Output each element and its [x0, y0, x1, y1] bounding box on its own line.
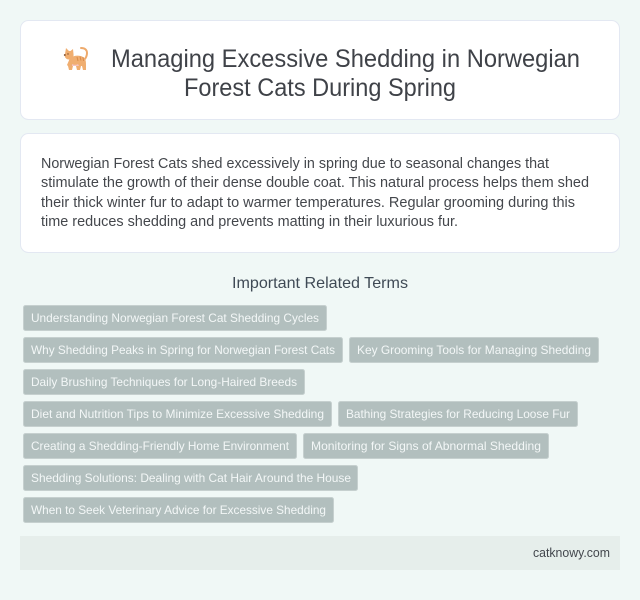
title: Forest Cats During Spring: [184, 74, 456, 102]
tag: shedding cycles: Understanding Norwegian Forest Cat Shedding Cycles: [31, 311, 319, 325]
tag: spring peak: Why Shedding Peaks in Spring for Norwegian Forest Cats: [31, 343, 335, 357]
tag: grooming tools: Key Grooming Tools for Managing Shedding: [357, 343, 591, 357]
text block: description: Norwegian Forest Cats shed excessively in spring due to seasonal changes that: [41, 156, 549, 172]
panel: description card: [20, 134, 620, 252]
tag: spring peak: [24, 338, 342, 362]
tag: abnormal shedding: Monitoring for Signs of Abnormal Shedding: [311, 439, 541, 453]
tag: daily brushing: [24, 370, 304, 394]
tag: home environment: [24, 434, 296, 458]
title: [111, 45, 580, 102]
tag: bathing strategies: Bathing Strategies for Reducing Loose Fur: [346, 407, 570, 421]
tag: grooming tools: [350, 338, 598, 362]
panel: title card: [20, 20, 620, 120]
footer bar: [20, 536, 620, 570]
tag list: [24, 306, 598, 522]
text block: description: time reduces shedding and prevents matting in their luxurious fur.: [41, 214, 458, 230]
tag: shedding cycles: [24, 306, 326, 330]
tag: veterinary advice: When to Seek Veterinary Advice for Excessive Shedding: [31, 503, 326, 517]
tag: bathing strategies: [338, 402, 578, 426]
text block: description: [41, 156, 589, 230]
tag: diet and nutrition: Diet and Nutrition Tips to Minimize Excessive Shedding: [31, 407, 324, 421]
tag: veterinary advice: [24, 498, 334, 522]
footer source text: catknowy.com: [533, 545, 610, 560]
tag: home environment: Creating a Shedding-Friendly Home Environment: [31, 439, 290, 453]
tag: shedding solutions: [24, 466, 358, 490]
text block: description: stimulate the growth of their dense double coat. This natural process helps them shed: [41, 175, 589, 191]
tag: abnormal shedding: [304, 434, 548, 458]
icon: cat: [64, 48, 87, 70]
text block: description: their thick winter fur to adapt to warmer temperatures. Regular grooming during this: [41, 195, 575, 211]
tag: daily brushing: Daily Brushing Techniques for Long-Haired Breeds: [31, 375, 297, 389]
title: Managing Excessive Shedding in Norwegian: [111, 45, 580, 73]
tag: shedding solutions: Shedding Solutions: Dealing with Cat Hair Around the House: [31, 471, 351, 485]
heading: related terms: Important Related Terms: [232, 275, 408, 292]
tag: diet and nutrition: [24, 402, 332, 426]
